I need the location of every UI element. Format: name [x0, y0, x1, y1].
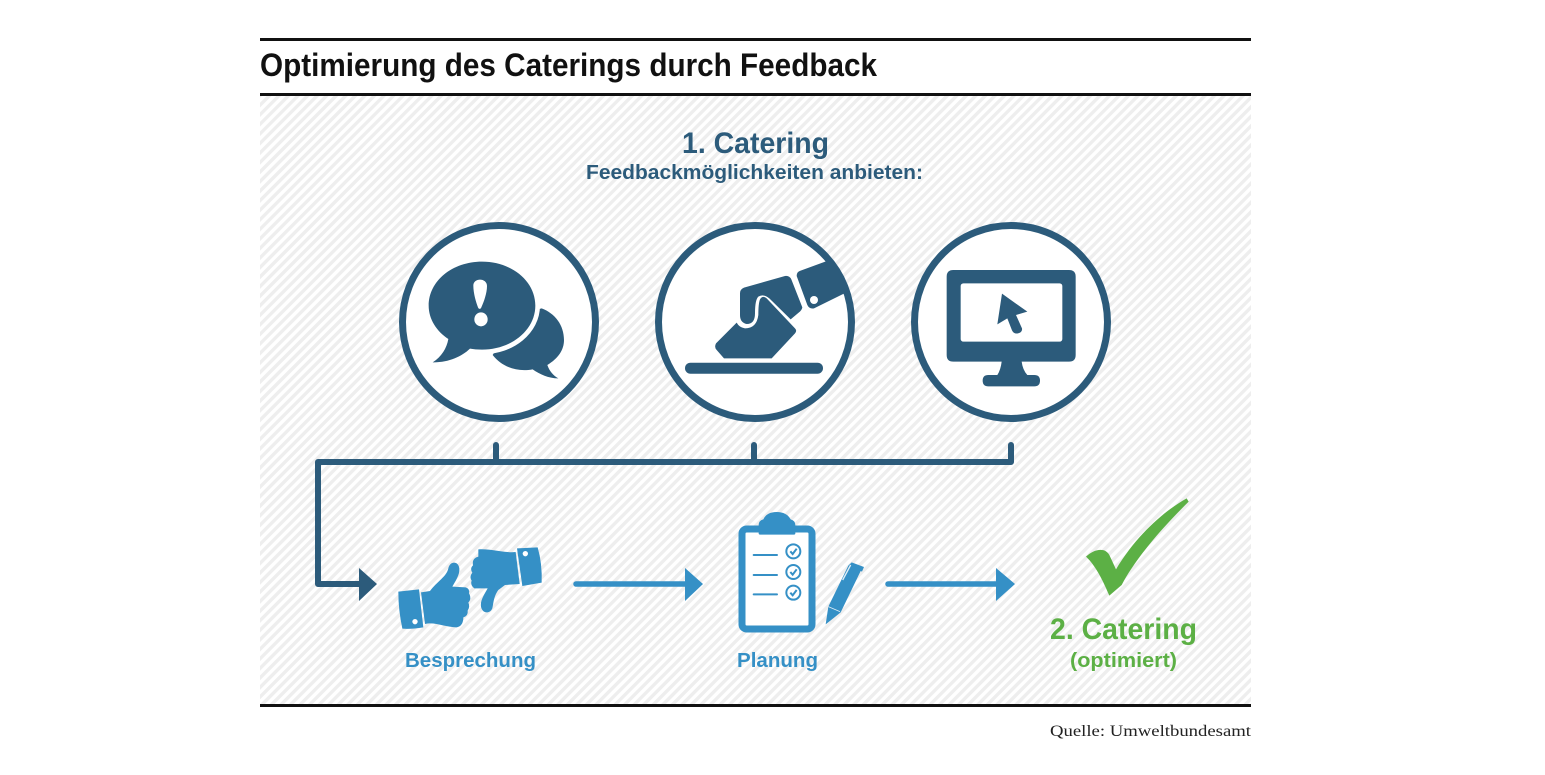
icon: speech bubbles: [402, 226, 596, 418]
top rule: [260, 38, 1251, 41]
subheading: optimiert: (optimiert): [1070, 650, 1177, 672]
bottom rule: [260, 704, 1251, 707]
ballot slot: [685, 363, 823, 374]
arrow: planning to optimized catering: [888, 568, 1015, 601]
subheading: Feedback options: Feedbackmöglichkeiten anbieten:: [586, 162, 923, 184]
arrow: discussion to planning: [576, 568, 703, 601]
heading: 2. Catering: 2. Catering: [1050, 613, 1197, 646]
background: striped panel: [260, 95, 1251, 705]
title: Optimierung des Caterings durch Feedback: [260, 47, 877, 83]
connector: bracket arrow from options to discussion: [318, 445, 1011, 601]
icon: thumbs up and down: [398, 547, 542, 629]
title rule: [260, 93, 1251, 96]
icon: ballot box hand: [658, 226, 857, 418]
source note: Quelle: Umweltbundesamt: [1050, 723, 1252, 740]
label: Besprechung: Besprechung: [405, 650, 536, 672]
icon: clipboard and pen: [742, 512, 864, 629]
label: Planung: Planung: [737, 650, 818, 672]
icon: computer monitor: [914, 226, 1108, 418]
icon: green check mark: [1086, 498, 1189, 596]
heading: 1. Catering: 1. Catering: [682, 127, 829, 160]
